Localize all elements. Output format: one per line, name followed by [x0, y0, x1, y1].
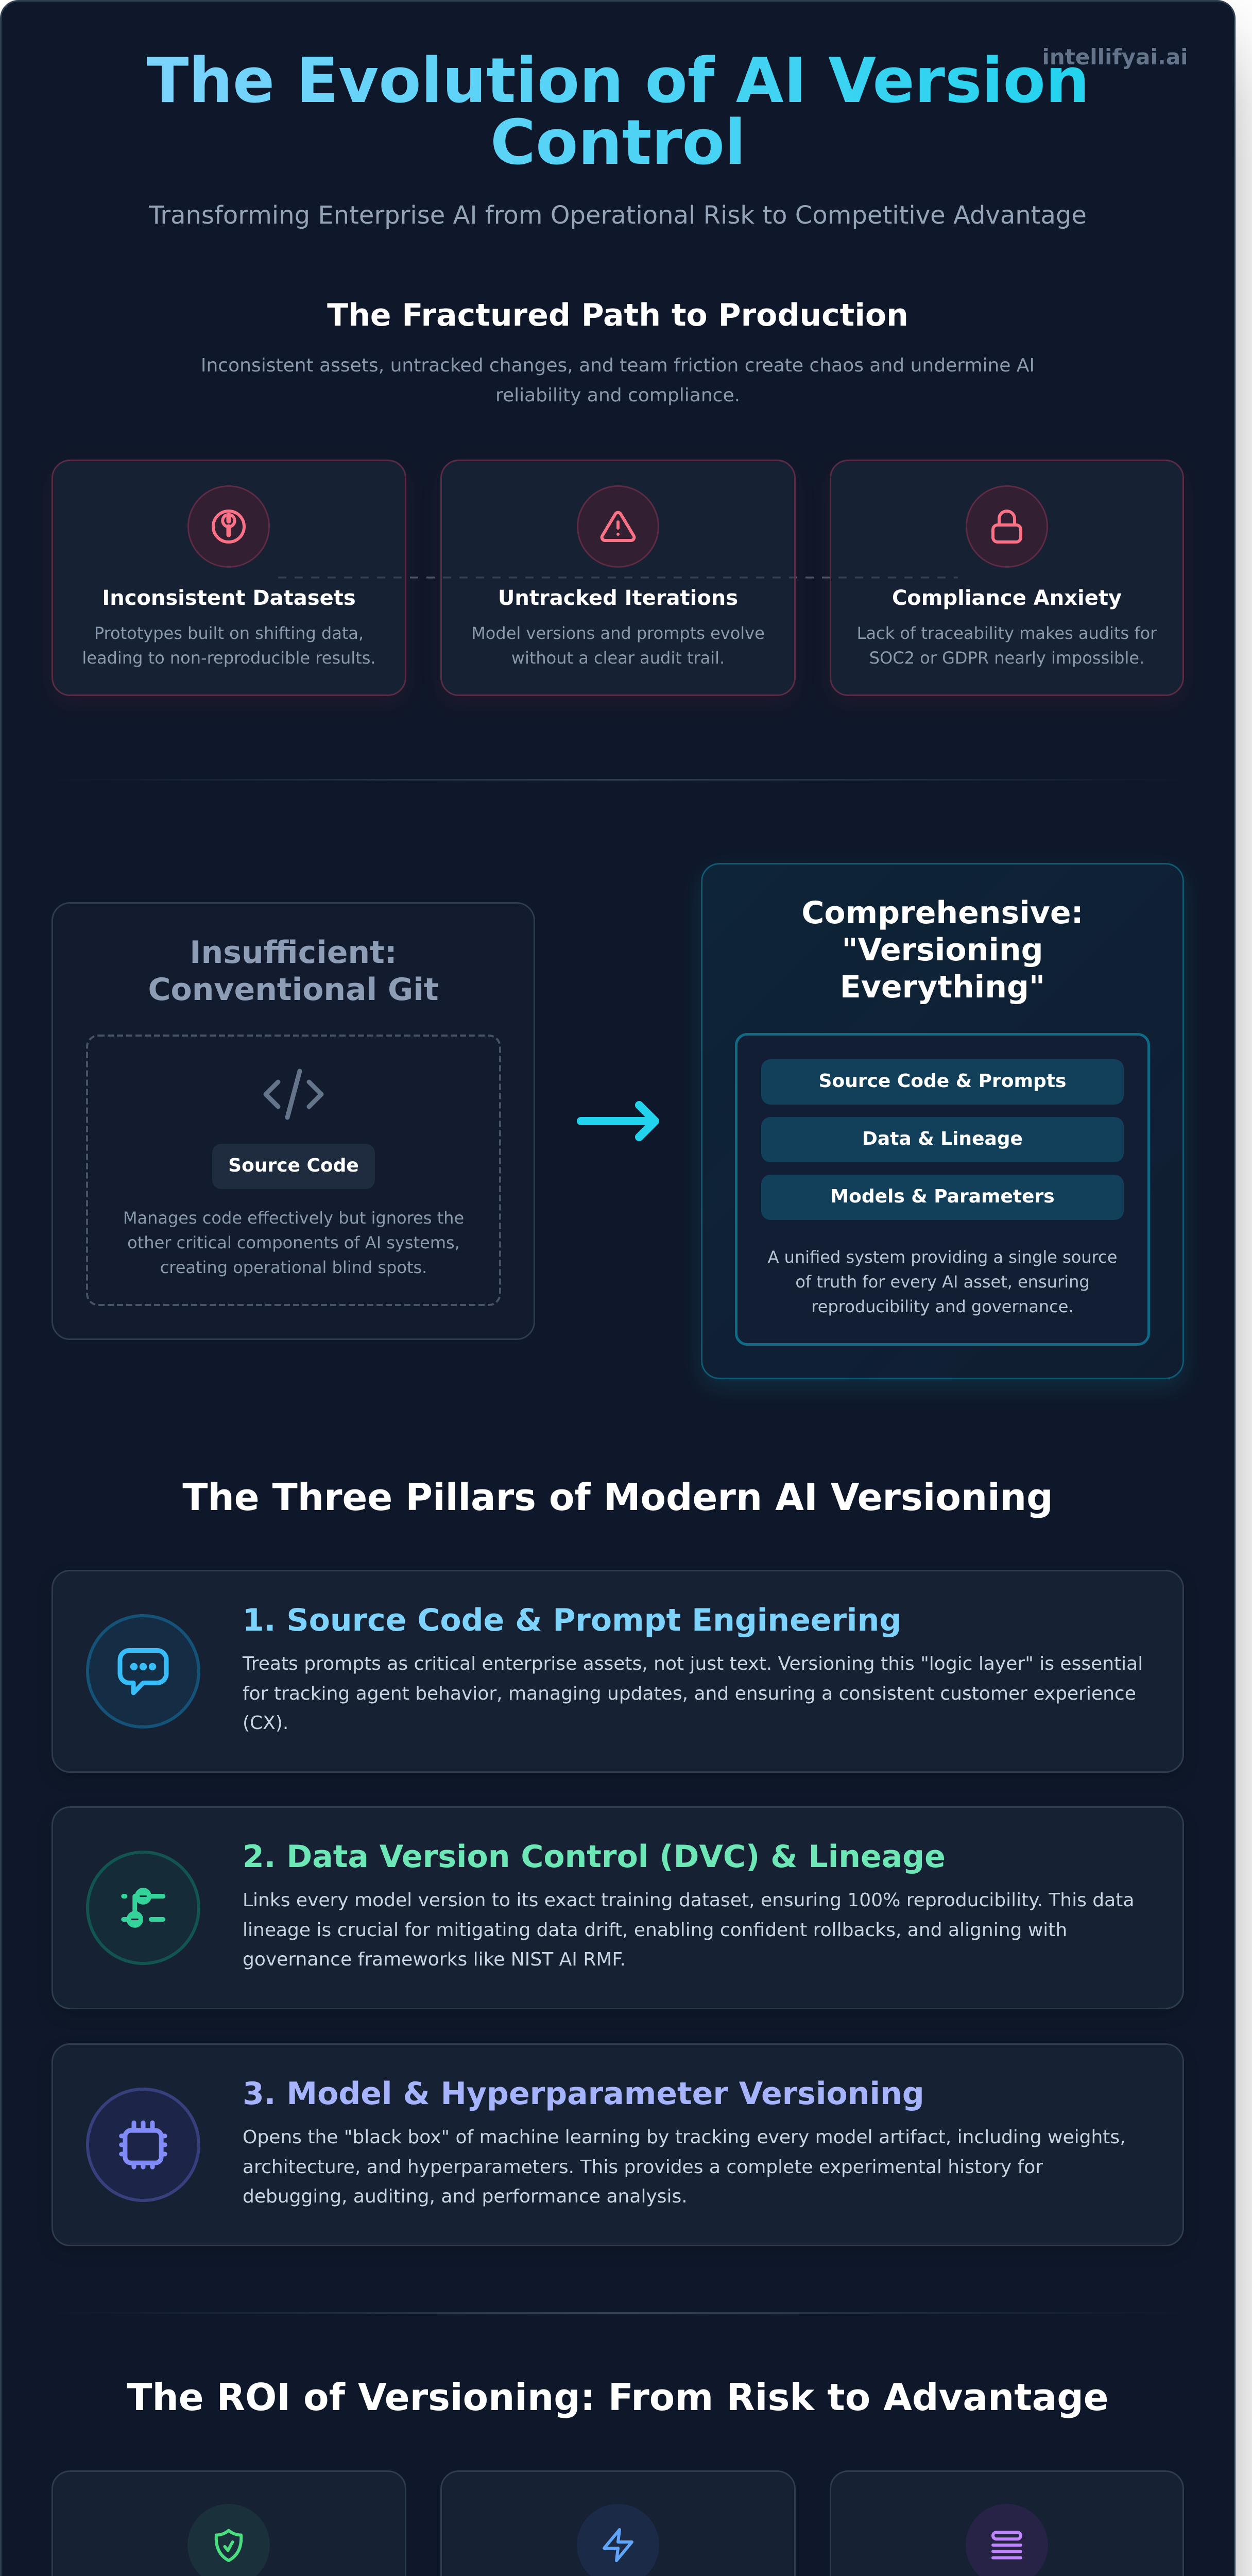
panel heading [148, 935, 439, 1008]
pillar text [242, 1653, 1143, 1734]
pillar title: 2. Data Version Control (DVC) & Lineage [243, 1839, 946, 1875]
bar: source code and prompts [761, 1059, 1124, 1105]
box text [123, 1208, 464, 1277]
box text [767, 1247, 1117, 1316]
title: The Evolution of AI Version [147, 45, 1089, 117]
panel heading [801, 895, 1084, 1005]
panel: comprehensive versioning everything [701, 863, 1184, 1379]
panel heading: "Versioning [842, 932, 1043, 968]
panel: compliance anxiety [830, 460, 1184, 696]
card title: Inconsistent Datasets [102, 586, 356, 610]
card text: leading to non-reproducible results. [82, 648, 376, 668]
pillar text: Treats prompts as critical enterprise assets, not just text. Versioning this "logic layer" is essential [243, 1653, 1143, 1674]
box text: Manages code effectively but ignores the [123, 1208, 464, 1228]
panel: inconsistent datasets [52, 460, 406, 696]
dashed box [86, 1035, 501, 1306]
icon: warning triangle [577, 485, 659, 568]
pillar text: for tracking agent behavior, managing updates, and ensuring a consistent customer experience [243, 1683, 1136, 1704]
card text: Model versions and prompts evolve [471, 623, 765, 643]
heading: three pillars: The Three Pillars of Modern AI Versioning [182, 1476, 1053, 1519]
bar: models and parameters: Models & Parameters [830, 1186, 1055, 1207]
pillar title: 1. Source Code & Prompt Engineering [243, 1602, 901, 1638]
panel heading: Conventional Git [148, 972, 439, 1008]
panel: accelerated innovation [440, 2470, 796, 2576]
icon: wrench in circle [187, 485, 270, 568]
pillar text: Links every model version to its exact training dataset, ensuring 100% reproducibility. This data [243, 1890, 1134, 1911]
card title: Compliance Anxiety [892, 586, 1122, 610]
title: Control [490, 107, 746, 179]
box text: A unified system providing a single source [768, 1247, 1117, 1267]
dashed connector line [278, 577, 958, 579]
panel: untracked iterations [440, 460, 796, 696]
card text [471, 623, 765, 668]
intro text: fractured path [201, 355, 1035, 406]
card text [82, 623, 376, 668]
pillar text [243, 1890, 1134, 1970]
pillar title: 3. Model & Hyperparameter Versioning [243, 2076, 924, 2112]
icon: code brackets [264, 1069, 323, 1120]
panel heading: Everything" [840, 969, 1045, 1005]
bar: data and lineage [761, 1117, 1124, 1162]
box text: of truth for every AI asset, ensuring [795, 1272, 1090, 1292]
icon: shield check [187, 2504, 270, 2576]
card text: Prototypes built on shifting data, [94, 623, 364, 643]
title [139, 50, 1097, 174]
pillar text: governance frameworks like NIST AI RMF. [243, 1949, 626, 1970]
icon: padlock [966, 485, 1048, 568]
pillar text: (CX). [243, 1713, 288, 1734]
section divider [52, 779, 1184, 781]
pillar text: architecture, and hyperparameters. This provides a complete experimental history for [243, 2157, 1043, 2178]
pillar text: debugging, auditing, and performance analysis. [243, 2186, 688, 2207]
pillar text [243, 2127, 1126, 2207]
intro text: fractured path: Inconsistent assets, untracked changes, and team friction create chaos and undermine AI [201, 355, 1035, 376]
inner box [735, 1033, 1150, 1346]
box text: creating operational blind spots. [160, 1258, 427, 1277]
card text [857, 623, 1157, 668]
panel: pillar 1 [52, 1570, 1184, 1773]
source code pill [212, 1144, 375, 1189]
pillar text: lineage is crucial for mitigating data drift, enabling confident rollbacks, and aligning with [243, 1920, 1067, 1941]
panel heading: Comprehensive: [801, 895, 1084, 931]
box text: other critical components of AI systems, [127, 1233, 460, 1252]
bar: source code and prompts: Source Code & Prompts [819, 1071, 1066, 1092]
icon: branch lineage [86, 1851, 200, 1965]
panel heading: Insufficient: [190, 935, 397, 971]
box text: reproducibility and governance. [811, 1297, 1074, 1316]
subtitle: Transforming Enterprise AI from Operational Risk to Competitive Advantage [149, 201, 1087, 230]
heading: ROI: The ROI of Versioning: From Risk to Advantage [127, 2376, 1109, 2419]
panel: pillar 2 [52, 1806, 1184, 2009]
panel: compliance and risk mitigation [52, 2470, 406, 2576]
bar: data and lineage: Data & Lineage [862, 1128, 1023, 1149]
panel: pillar 3 [52, 2043, 1184, 2246]
heading: fractured path: The Fractured Path to Production [327, 297, 908, 333]
bar: models and parameters [761, 1175, 1124, 1220]
panel: insufficient conventional git [52, 902, 535, 1340]
section divider [52, 2312, 1184, 2314]
arrow [577, 1101, 659, 1141]
watermark: intellifyai.ai: intellifyai.ai [1042, 44, 1188, 70]
source code pill: Source Code [228, 1155, 359, 1176]
icon: processor chip [86, 2088, 200, 2202]
icon: server stack [966, 2504, 1048, 2576]
card text: SOC2 or GDPR nearly impossible. [869, 648, 1144, 668]
card text: Lack of traceability makes audits for [857, 623, 1157, 643]
panel: scalable future-proof core [830, 2470, 1184, 2576]
intro text: fractured path: reliability and compliance. [495, 385, 740, 406]
card text: without a clear audit trail. [511, 648, 725, 668]
icon: lightning bolt [577, 2504, 659, 2576]
card title: Untracked Iterations [498, 586, 738, 610]
pillar text: Opens the "black box" of machine learning by tracking every model artifact, including weights, [243, 2127, 1126, 2148]
icon: chat bubble [86, 1614, 200, 1728]
